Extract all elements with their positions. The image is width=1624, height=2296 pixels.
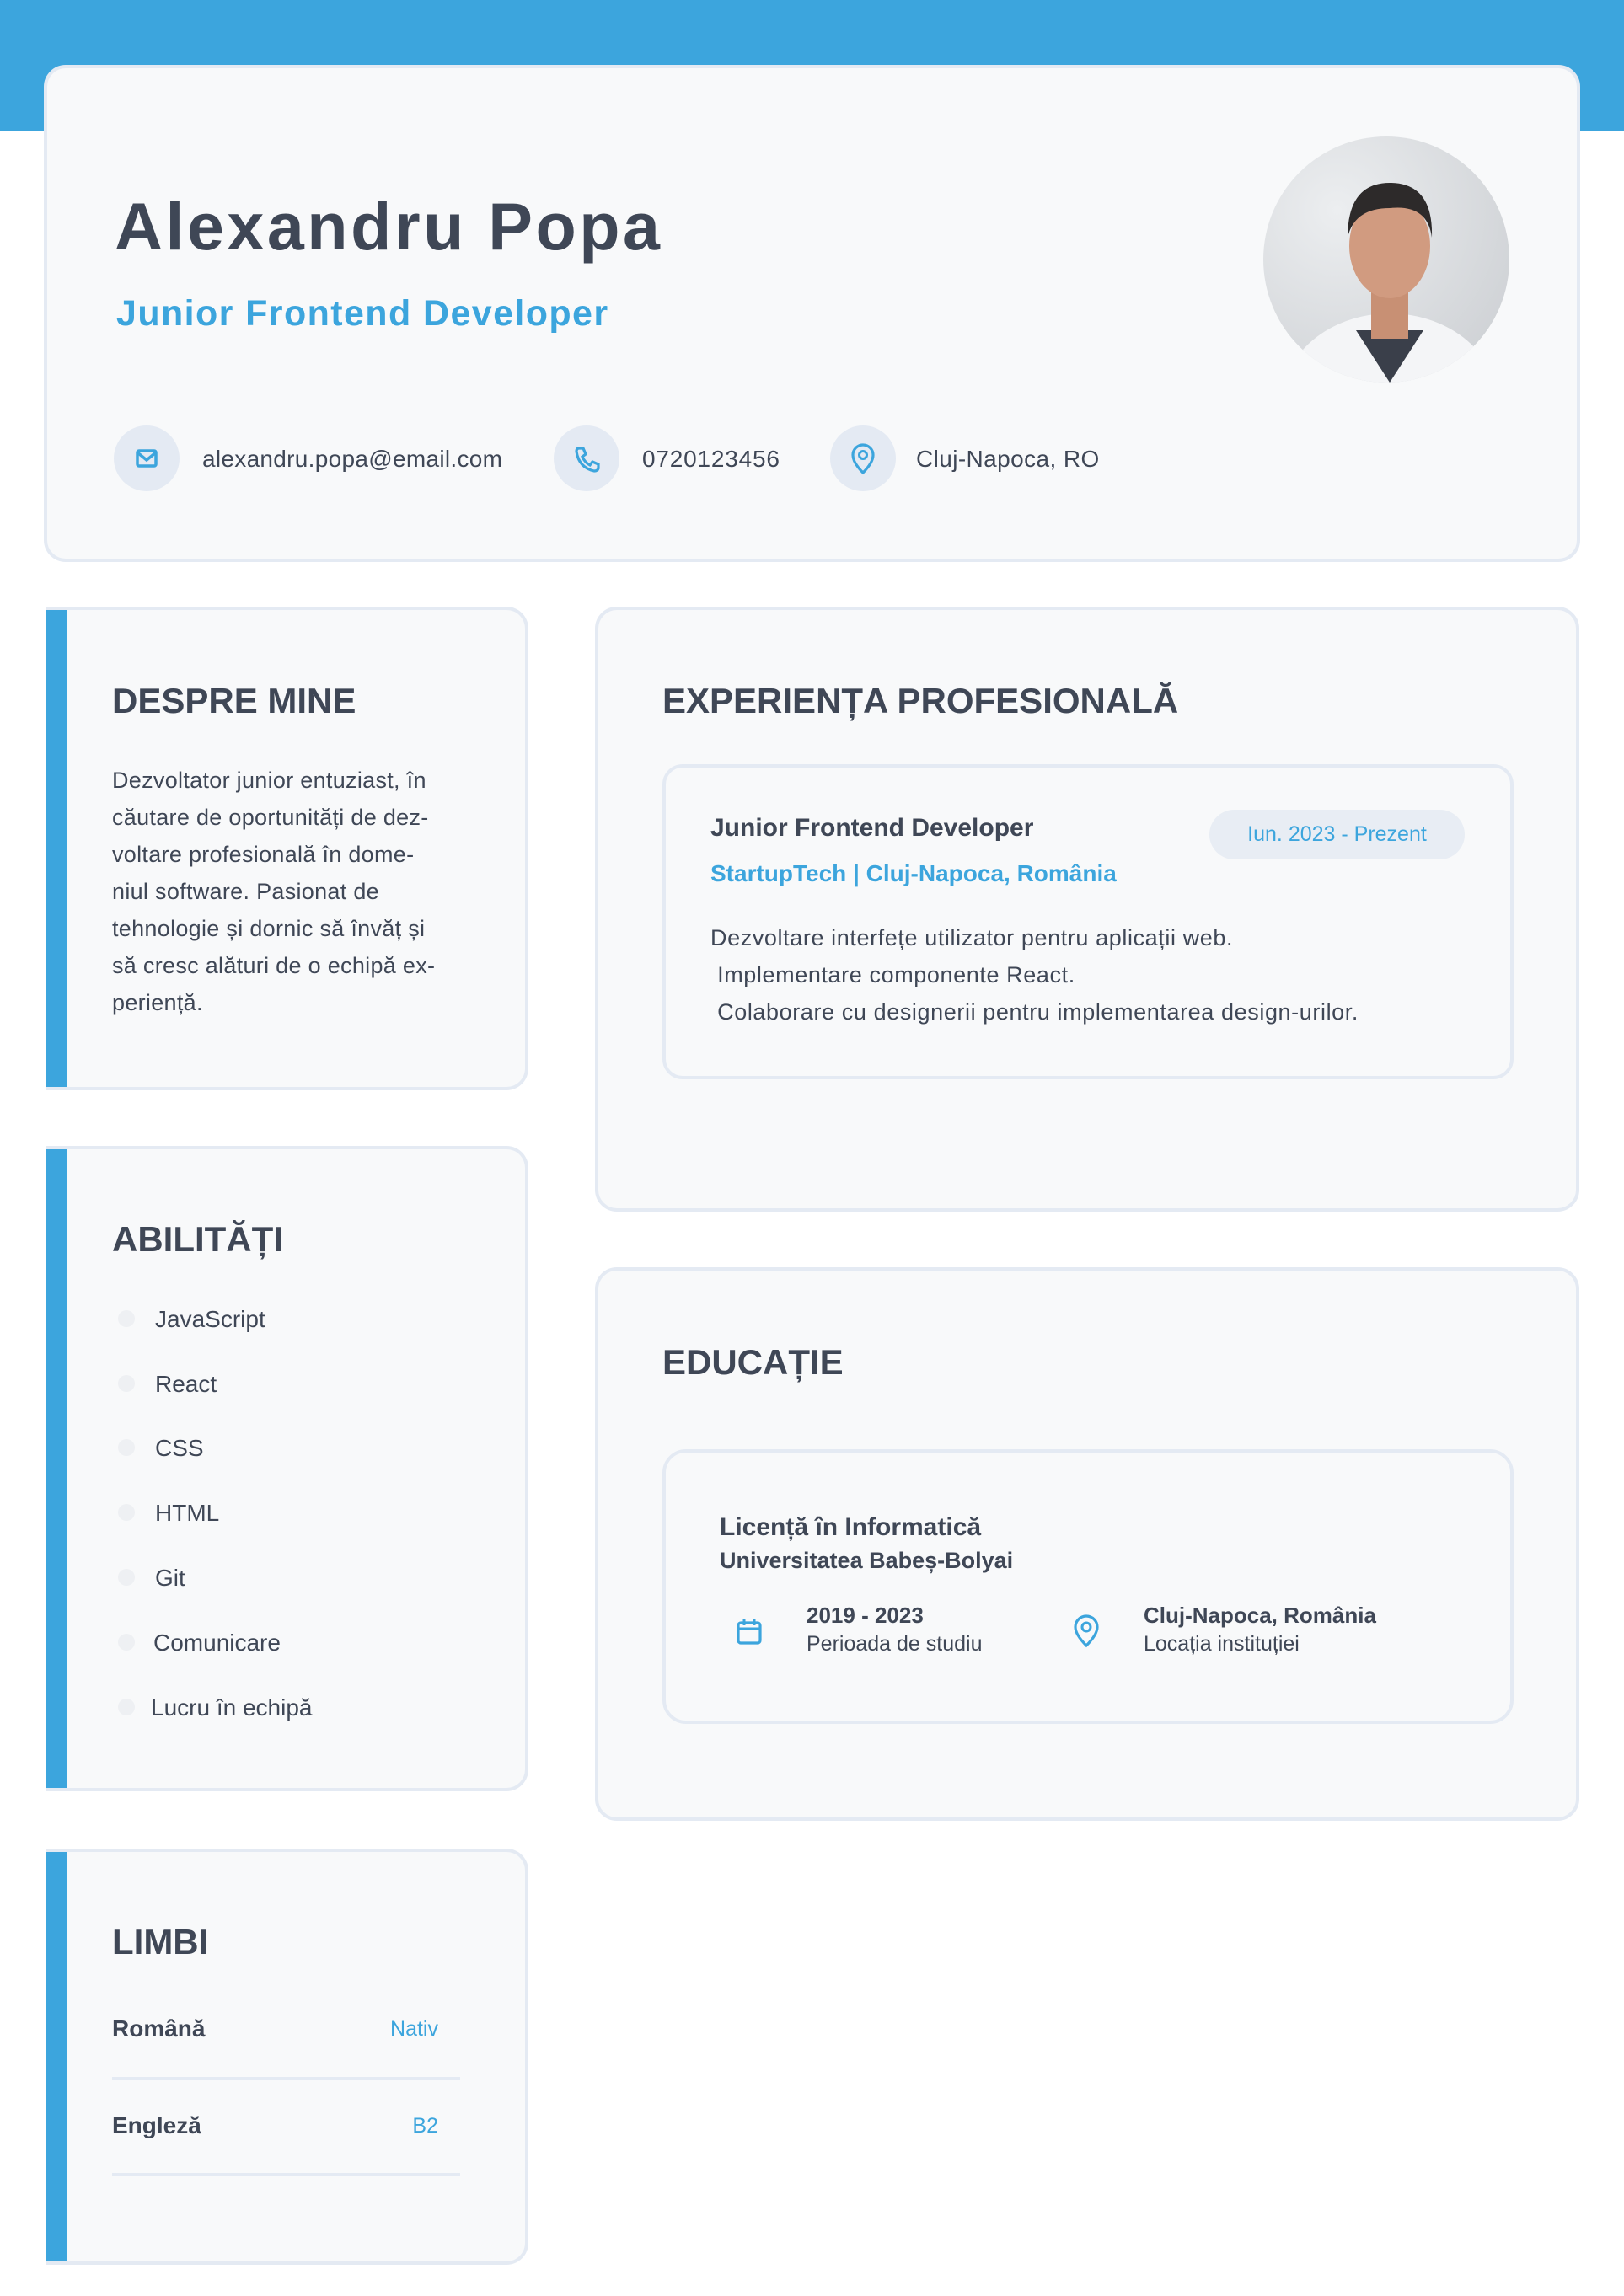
language: romana: Nativ xyxy=(390,2017,438,2041)
skills list xyxy=(118,1306,312,1721)
contact: location xyxy=(830,425,1100,491)
skills list: Comunicare xyxy=(153,1630,281,1656)
about text: periență. xyxy=(112,990,203,1015)
language: engleza: B2 xyxy=(412,2114,438,2138)
panel: educatie xyxy=(595,1267,1579,1821)
skills list: Lucru în echipă xyxy=(151,1694,312,1721)
education entry: Perioada de studiu xyxy=(807,1632,982,1656)
skills list: Git xyxy=(155,1565,185,1591)
university: Universitatea Babeș-Bolyai xyxy=(720,1548,1013,1573)
contact: phone xyxy=(554,425,780,491)
about text: Dezvoltator junior entuziast, în xyxy=(112,768,426,793)
panel: limbi xyxy=(46,1849,528,2265)
education entry xyxy=(662,1449,1514,1724)
date pill xyxy=(1209,810,1465,859)
panel: despre mine xyxy=(46,607,528,1090)
header card xyxy=(44,65,1580,562)
about text: tehnologie și dornic să învăț și xyxy=(112,916,425,941)
text: 0720123456 xyxy=(642,446,780,472)
about text: niul software. Pasionat de xyxy=(112,879,379,904)
skills list: HTML xyxy=(155,1500,219,1526)
about text: să cresc alături de o echipă ex- xyxy=(112,953,435,978)
job title: Junior Frontend Developer xyxy=(710,814,1033,842)
degree: Licență în Informatică xyxy=(720,1513,981,1541)
job title: Junior Frontend Developer xyxy=(116,293,609,334)
education entry: Locația instituției xyxy=(1144,1632,1300,1656)
skills list: React xyxy=(155,1371,217,1397)
skills list: JavaScript xyxy=(155,1306,265,1332)
heading: limbi: LIMBI xyxy=(112,1922,208,1962)
language: romana xyxy=(112,2015,460,2080)
language: engleza xyxy=(112,2112,460,2176)
job description: Dezvoltare interfețe utilizator pentru aplicații web. Implementare componente React. Colaborare cu designerii pentru implementarea design-urilor. xyxy=(710,925,1359,1025)
heading: experienta: EXPERIENȚA PROFESIONALĂ xyxy=(662,681,1178,720)
about text: căutare de oportunități de dez- xyxy=(112,805,429,830)
panel: experienta xyxy=(595,607,1579,1212)
skills list: CSS xyxy=(155,1435,204,1461)
heading: despre mine: DESPRE MINE xyxy=(112,681,356,720)
company: StartupTech | Cluj-Napoca, România xyxy=(710,860,1117,886)
panel: abilitati xyxy=(46,1146,528,1791)
location: Cluj-Napoca, România xyxy=(1144,1603,1376,1628)
job entry xyxy=(662,764,1514,1079)
about text xyxy=(112,768,435,1015)
text: Cluj-Napoca, RO xyxy=(916,446,1100,472)
about text: voltare profesională în dome- xyxy=(112,842,414,867)
heading: abilitati: ABILITĂȚI xyxy=(112,1219,283,1259)
contact: email xyxy=(114,425,502,491)
photo xyxy=(1263,136,1509,383)
icon: calendar xyxy=(737,1619,762,1645)
top blue band xyxy=(0,0,1624,131)
text: alexandru.popa@email.com xyxy=(202,446,502,472)
heading: educatie: EDUCAȚIE xyxy=(662,1342,844,1382)
date pill: Iun. 2023 - Prezent xyxy=(1247,822,1427,846)
name: Alexandru Popa xyxy=(115,189,662,264)
period: 2019 - 2023 xyxy=(807,1603,924,1628)
language: romana: Română xyxy=(112,2015,205,2042)
icon: pin xyxy=(1074,1614,1099,1648)
language: engleza: Engleză xyxy=(112,2112,201,2138)
